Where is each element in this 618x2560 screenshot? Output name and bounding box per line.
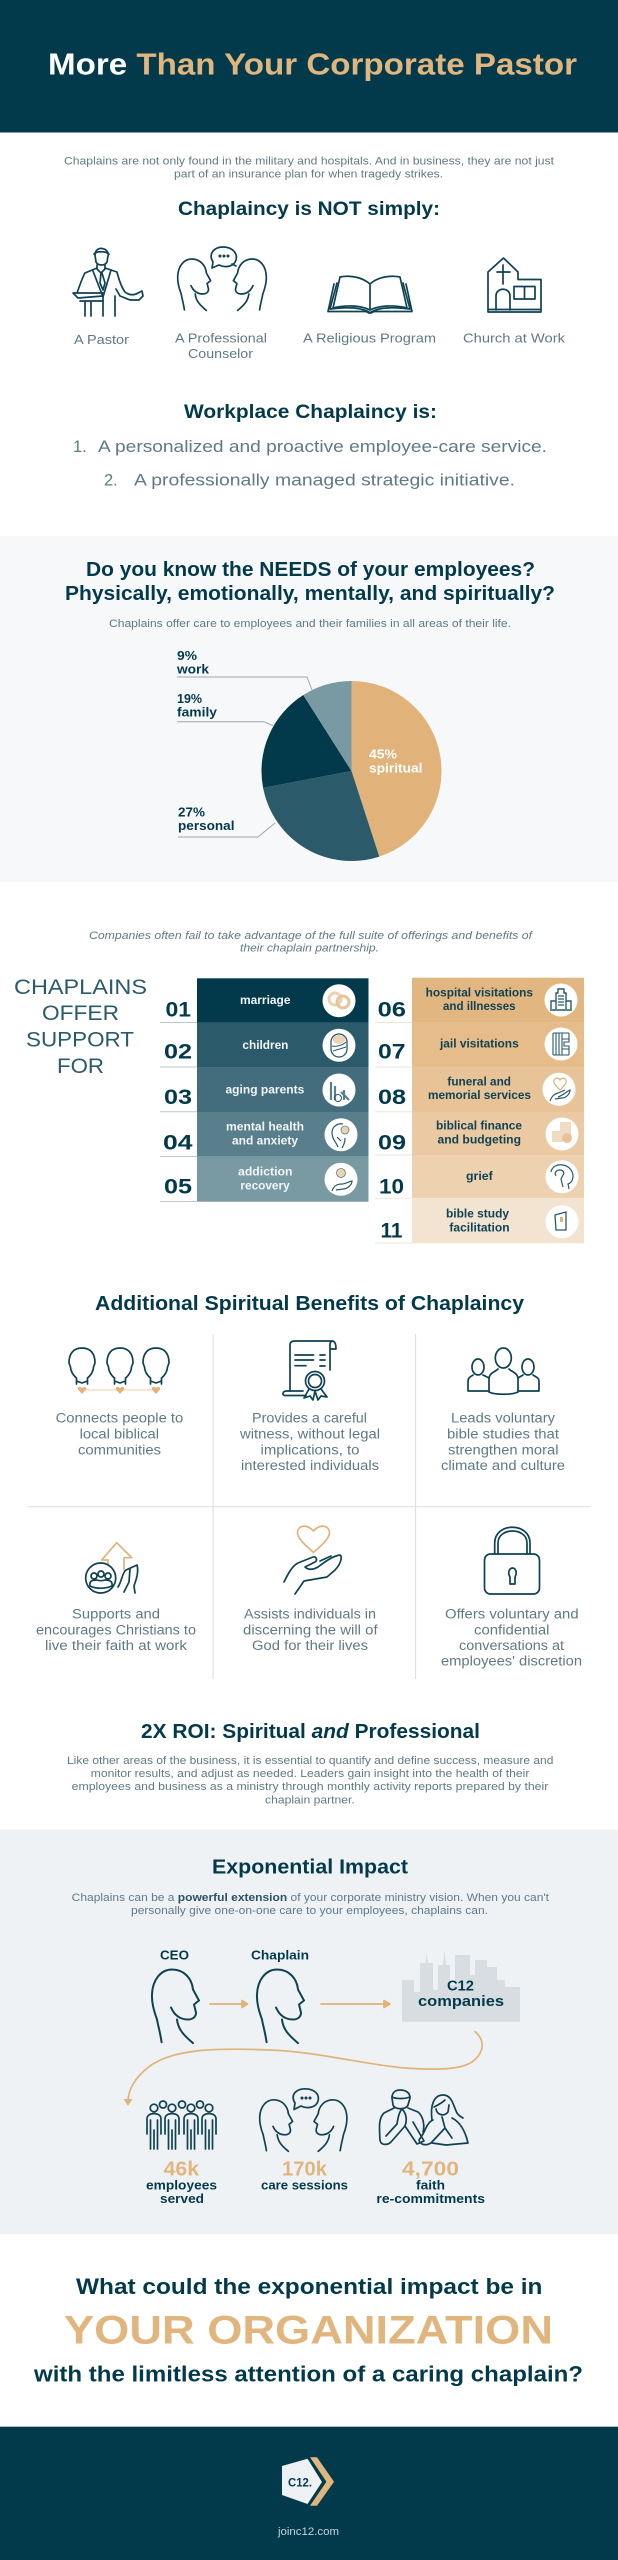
row labels: mental health bbox=[226, 1122, 304, 1134]
roi paragraph bbox=[67, 1755, 553, 1806]
row labels: bible study bbox=[446, 1209, 510, 1221]
pie labels: work bbox=[176, 663, 209, 677]
heading: chaplains offer support for: CHAPLAINS bbox=[14, 976, 147, 999]
roi paragraph: monitor results, and adjust as needed. Leaders gain insight into the health of their bbox=[91, 1768, 530, 1780]
pie labels: 19% bbox=[177, 692, 202, 706]
benefit text: Connects people to bbox=[56, 1411, 183, 1426]
panel: support list right bbox=[375, 978, 584, 1243]
stats bbox=[146, 2159, 485, 2206]
italic intro bbox=[89, 930, 533, 955]
numbers: 10 bbox=[379, 1175, 404, 1198]
heading: Exponential Impact bbox=[212, 1856, 408, 1878]
icon: connected heads bbox=[69, 1348, 169, 1394]
benefit text: bible studies that bbox=[447, 1426, 559, 1441]
labels: A Professional bbox=[175, 330, 267, 346]
benefit text: witness, without legal bbox=[239, 1426, 380, 1441]
row labels: addiction bbox=[238, 1166, 292, 1178]
city: c12 companies: companies bbox=[418, 1994, 504, 2010]
numbers: 03 bbox=[164, 1086, 192, 1109]
benefit text: Offers voluntary and bbox=[445, 1606, 579, 1621]
website: joinc12.com bbox=[277, 2526, 339, 2538]
row icons bbox=[322, 984, 358, 1196]
icon: employees bbox=[147, 2101, 216, 2149]
city: c12 companies: C12 bbox=[447, 1979, 474, 1995]
row labels: marriage bbox=[240, 995, 290, 1007]
pie labels: 9% bbox=[177, 649, 197, 663]
row labels: and budgeting bbox=[438, 1134, 521, 1146]
pie chart: 45% bbox=[369, 748, 397, 762]
heading: chaplaincy is not: Chaplaincy is NOT simply: bbox=[178, 198, 440, 220]
heading: needs bbox=[65, 559, 555, 605]
labels bbox=[74, 330, 566, 361]
pie labels: 27% bbox=[178, 806, 205, 820]
subheading: Chaplains offer care to employees and their families in all areas of their life. bbox=[109, 618, 511, 630]
benefit text: Supports and bbox=[72, 1606, 160, 1621]
row labels: jail visitations bbox=[439, 1038, 519, 1050]
intro text: Chaplains are not only found in the military and hospitals. And in business, they are not just bbox=[64, 156, 554, 168]
stats: 46k bbox=[164, 2159, 200, 2181]
benefit text: Assists individuals in bbox=[244, 1606, 376, 1621]
row labels: recovery bbox=[240, 1180, 290, 1192]
paragraph: Chaplains can be a powerful extension of your corporate ministry vision. When you can't bbox=[72, 1892, 549, 1904]
panel: benefits grid bbox=[28, 1334, 591, 1679]
benefit text: God for their lives bbox=[252, 1638, 368, 1653]
row labels: aging parents bbox=[226, 1084, 304, 1096]
benefit text: interested individuals bbox=[241, 1458, 379, 1473]
numbered list: A personalized and proactive employee-care service. bbox=[98, 438, 547, 456]
icon: padlock bbox=[484, 1527, 540, 1594]
arrow: curved flow bbox=[124, 2032, 482, 2106]
panel: needs bbox=[0, 536, 618, 882]
numbered list bbox=[73, 438, 547, 490]
numbers: 01 bbox=[166, 999, 191, 1022]
benefit text: encourages Christians to bbox=[36, 1622, 196, 1637]
row labels: facilitation bbox=[449, 1223, 510, 1235]
benefit text: implications, to bbox=[260, 1442, 360, 1457]
stats: care sessions bbox=[261, 2178, 348, 2192]
icon: heart and hand bbox=[284, 1526, 341, 1594]
paragraph: personally give one-on-one care to your employees, chaplains can. bbox=[131, 1905, 488, 1917]
footer bbox=[0, 2427, 618, 2560]
benefit text: strengthen moral bbox=[448, 1442, 558, 1457]
icon: book bbox=[328, 276, 412, 313]
benefit text: local biblical bbox=[80, 1426, 159, 1441]
heading: 2x roi: 2X ROI: Spiritual and Professional bbox=[141, 1721, 480, 1743]
closing question: What could the exponential impact be in bbox=[76, 2274, 542, 2299]
paragraph bbox=[72, 1892, 549, 1917]
icon: care sessions bbox=[260, 2089, 347, 2151]
heading: chaplains offer support for: SUPPORT bbox=[26, 1029, 134, 1052]
closing question: with the limitless attention of a caring chaplain? bbox=[33, 2362, 583, 2387]
benefit text: climate and culture bbox=[441, 1458, 565, 1473]
benefit text: Provides a careful bbox=[252, 1411, 367, 1426]
heading: chaplains offer support for: OFFER bbox=[42, 1002, 119, 1025]
icon: professional counselor bbox=[178, 247, 266, 311]
row labels: and illnesses bbox=[443, 1001, 516, 1013]
icon: church bbox=[488, 258, 541, 312]
closing question bbox=[33, 2274, 583, 2387]
numbers bbox=[163, 999, 193, 1198]
flow labels: Chaplain bbox=[251, 1949, 309, 1963]
numbers: 04 bbox=[163, 1131, 193, 1154]
numbered list: 2. bbox=[104, 472, 118, 490]
numbers: 05 bbox=[164, 1175, 192, 1198]
icon: praying people bbox=[379, 2090, 468, 2145]
numbers bbox=[378, 999, 406, 1242]
row icons bbox=[542, 984, 578, 1238]
numbers: 02 bbox=[164, 1040, 192, 1064]
logo bbox=[282, 2457, 334, 2506]
numbered list: A professionally managed strategic initiative. bbox=[134, 472, 515, 490]
stats: re-commitments bbox=[376, 2191, 485, 2206]
logo: C12. bbox=[288, 2476, 312, 2490]
intro text bbox=[64, 156, 554, 180]
row labels bbox=[226, 995, 304, 1192]
labels: A Pastor bbox=[74, 332, 130, 347]
row labels: memorial services bbox=[428, 1090, 531, 1102]
pie labels bbox=[176, 649, 312, 837]
flow labels: CEO bbox=[160, 1949, 189, 1963]
benefit text: conversations at bbox=[459, 1638, 564, 1653]
panel: exponential impact bbox=[0, 1830, 618, 2234]
labels: A Religious Program bbox=[303, 330, 436, 346]
icon: chaplain head bbox=[257, 1970, 304, 2043]
heading: additional spiritual benefits: Additional Spiritual Benefits of Chaplaincy bbox=[95, 1293, 525, 1315]
benefit text: discerning the will of bbox=[243, 1622, 378, 1637]
roi paragraph: Like other areas of the business, it is essential to quantify and define success, measure and bbox=[67, 1755, 553, 1767]
numbers: 07 bbox=[378, 1040, 406, 1064]
city: c12 companies bbox=[402, 1950, 520, 2022]
row labels: grief bbox=[466, 1171, 493, 1183]
row labels: and anxiety bbox=[232, 1136, 299, 1148]
row labels: hospital visitations bbox=[426, 988, 533, 1000]
labels: Counselor bbox=[188, 346, 254, 361]
heading: needs: Physically, emotionally, mentally, and spiritually? bbox=[65, 583, 555, 605]
heading: chaplains offer support for bbox=[14, 976, 147, 1078]
icon: lift faith bbox=[86, 1543, 138, 1593]
italic intro: their chaplain partnership. bbox=[240, 943, 379, 955]
title: More Than Your Corporate Pastor bbox=[48, 46, 577, 82]
flow labels bbox=[160, 1949, 309, 1963]
pie chart: spiritual bbox=[369, 762, 422, 776]
arrow: ceo to chaplain bbox=[210, 2000, 248, 2008]
numbers: 08 bbox=[378, 1086, 406, 1109]
intro text: part of an insurance plan for when tragedy strikes. bbox=[174, 168, 443, 180]
numbers: 06 bbox=[378, 999, 406, 1022]
labels: Church at Work bbox=[463, 330, 566, 346]
roi paragraph: chaplain partner. bbox=[265, 1794, 355, 1806]
icon: ceo head bbox=[152, 1970, 199, 2043]
numbers: 11 bbox=[380, 1219, 403, 1242]
row labels: biblical finance bbox=[436, 1120, 522, 1132]
row labels: children bbox=[242, 1040, 288, 1052]
numbered list: 1. bbox=[73, 438, 87, 456]
stats: faith bbox=[416, 2178, 445, 2192]
italic intro: Companies often fail to take advantage of the full suite of offerings and benefits of bbox=[89, 930, 533, 942]
row labels bbox=[426, 988, 533, 1235]
numbers: 09 bbox=[378, 1131, 406, 1154]
panel: support list left bbox=[160, 978, 368, 1202]
stats: 4,700 bbox=[402, 2159, 459, 2181]
pie labels: family bbox=[177, 706, 217, 720]
stats: employees bbox=[146, 2178, 217, 2192]
icon: pastor bbox=[73, 248, 143, 316]
benefit text: employees' discretion bbox=[441, 1653, 582, 1668]
panel: not simply items bbox=[73, 247, 566, 361]
arrow: chaplain to companies bbox=[321, 2000, 390, 2008]
pie chart bbox=[261, 681, 442, 861]
benefit text: live their faith at work bbox=[45, 1638, 187, 1653]
benefit text bbox=[36, 1411, 582, 1668]
stats: 170k bbox=[282, 2159, 328, 2181]
row labels: funeral and bbox=[447, 1076, 511, 1088]
pie labels: personal bbox=[178, 819, 234, 833]
header banner bbox=[0, 0, 618, 132]
benefit text: Leads voluntary bbox=[451, 1411, 555, 1426]
benefit text: communities bbox=[78, 1442, 161, 1457]
stats: served bbox=[160, 2191, 204, 2206]
heading: chaplains offer support for: FOR bbox=[57, 1055, 104, 1078]
heading: workplace chaplaincy: Workplace Chaplaincy is: bbox=[184, 401, 437, 423]
heading: needs: Do you know the NEEDS of your employees? bbox=[86, 559, 535, 581]
icon: group of three bbox=[468, 1348, 539, 1394]
closing question: YOUR ORGANIZATION bbox=[64, 2308, 553, 2352]
roi paragraph: employees and business as a ministry through monthly activity reports prepared by their bbox=[72, 1781, 549, 1793]
benefit text: confidential bbox=[474, 1622, 550, 1637]
icon: certificate bbox=[283, 1341, 336, 1400]
